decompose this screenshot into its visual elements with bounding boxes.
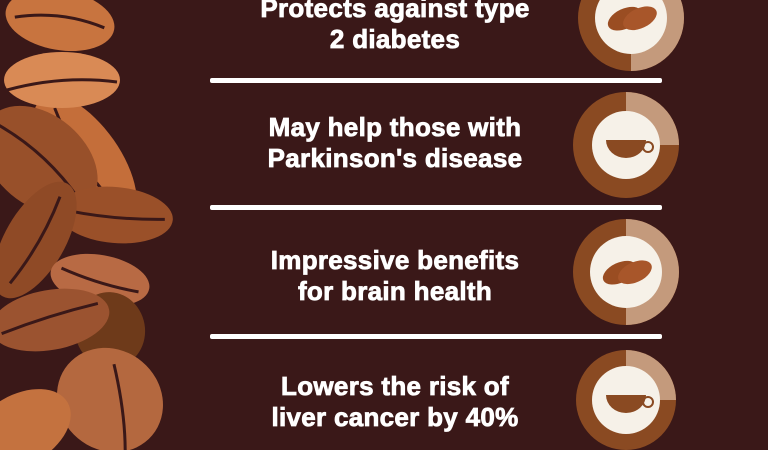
benefit 4 text: liver cancer by 40%: [271, 402, 519, 432]
benefit 2 text: [268, 112, 522, 173]
icon: bean ring 3: [573, 219, 679, 325]
benefit 2 text: Parkinson's disease: [268, 143, 522, 173]
benefit 1 text: 2 diabetes: [330, 24, 460, 54]
benefit 4 text: Lowers the risk of: [281, 371, 509, 401]
icon: cup ring 2: [573, 92, 679, 198]
benefit 3 text: [271, 245, 519, 306]
icon: cup ring 4: [576, 350, 676, 450]
benefit 4 text: [271, 371, 519, 432]
benefit 2 text: May help those with: [269, 112, 521, 142]
benefit 3 text: for brain health: [298, 276, 492, 306]
icon: bean ring 1: [578, 0, 684, 71]
benefit 3 text: Impressive benefits: [271, 245, 519, 275]
benefit 1 text: [260, 0, 530, 54]
